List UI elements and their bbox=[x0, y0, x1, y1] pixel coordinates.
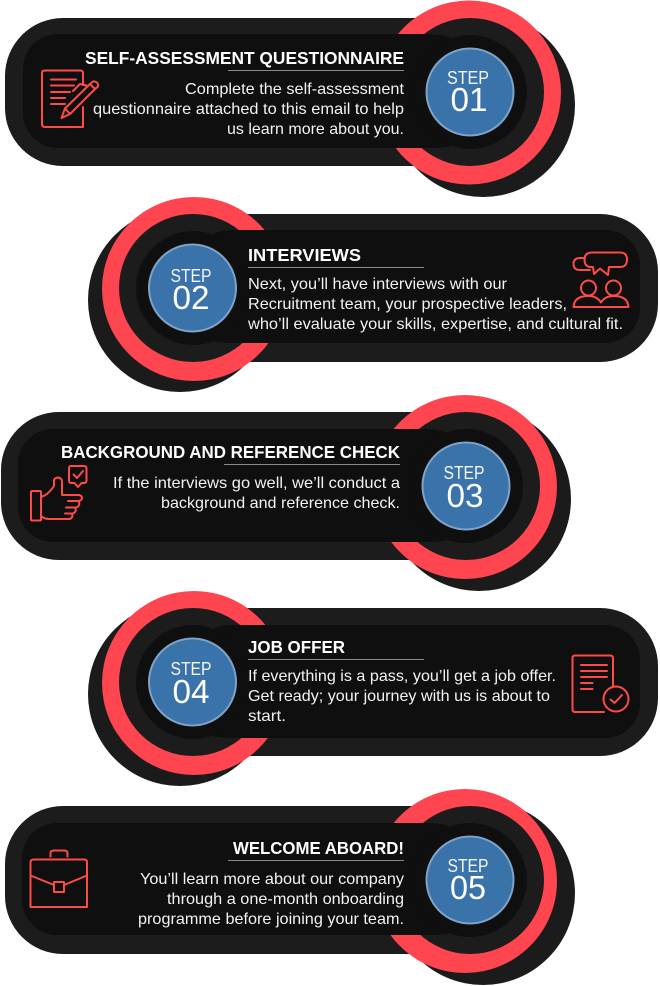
step 2 heading: INTERVIEWS bbox=[248, 245, 361, 265]
panel: step 1 self-assessment bbox=[5, 0, 575, 197]
step 4 badge bbox=[149, 638, 236, 726]
icon: document and pen bbox=[42, 70, 98, 127]
step 1 heading: SELF-ASSESSMENT QUESTIONNAIRE bbox=[85, 48, 404, 68]
step 3 badge bbox=[422, 442, 510, 530]
panel: step 4 job offer bbox=[88, 591, 658, 786]
step 4 badge: 04 bbox=[172, 673, 210, 710]
step 5 description: You’ll learn more about our company bbox=[140, 871, 404, 888]
panel: step 3 background check bbox=[1, 395, 571, 591]
step 1 description: questionnaire attached to this email to help bbox=[93, 101, 404, 118]
step 2 description: Recruitment team, your prospective leaders, bbox=[248, 296, 567, 313]
icon: document with check bbox=[572, 656, 628, 712]
step 4 description: start. bbox=[248, 708, 286, 725]
step 4 description: If everything is a pass, you’ll get a job offer. bbox=[248, 668, 556, 685]
step 2 description: Next, you’ll have interviews with our bbox=[248, 276, 508, 293]
icon: briefcase bbox=[30, 850, 87, 907]
step 3 description: If the interviews go well, we’ll conduct a bbox=[113, 475, 400, 492]
step 2 description: who’ll evaluate your skills, expertise, and cultural fit. bbox=[247, 316, 623, 333]
step 2 badge: 02 bbox=[172, 279, 210, 316]
step 1 description bbox=[93, 81, 405, 138]
step 5 heading: WELCOME ABOARD! bbox=[233, 838, 404, 858]
step 4 heading: JOB OFFER bbox=[248, 637, 345, 657]
step 5 badge: 05 bbox=[450, 869, 486, 906]
step 1 badge bbox=[426, 48, 514, 136]
step 3 description: background and reference check. bbox=[161, 495, 400, 512]
step 3 badge: 03 bbox=[446, 477, 484, 514]
step 5 description: programme before joining your team. bbox=[138, 911, 404, 928]
step 3 heading: BACKGROUND AND REFERENCE CHECK bbox=[61, 442, 400, 462]
panel: step 2 interviews bbox=[88, 197, 658, 392]
step 4 badge: STEP bbox=[170, 658, 212, 679]
step 5 description: through a one-month onboarding bbox=[167, 891, 404, 908]
step 4 description bbox=[248, 668, 556, 725]
step 2 description bbox=[247, 276, 623, 333]
step 3 description bbox=[113, 475, 400, 512]
panel: step 5 welcome aboard bbox=[5, 789, 575, 985]
icon: thumbs up bbox=[31, 466, 86, 520]
step 1 badge: 01 bbox=[450, 81, 488, 118]
step 1 badge: STEP bbox=[447, 67, 489, 88]
step 2 badge: STEP bbox=[170, 265, 212, 286]
step 3 badge: STEP bbox=[444, 462, 484, 483]
step 4 description: Get ready; your journey with us is about to bbox=[248, 688, 550, 705]
step 1 description: us learn more about you. bbox=[227, 121, 404, 138]
step 2 badge bbox=[149, 244, 236, 332]
icon: people talking bbox=[574, 252, 628, 307]
step 5 badge: STEP bbox=[448, 855, 488, 876]
step 1 description: Complete the self-assessment bbox=[185, 81, 405, 98]
step 5 description bbox=[138, 871, 404, 928]
step 5 badge bbox=[426, 836, 514, 924]
